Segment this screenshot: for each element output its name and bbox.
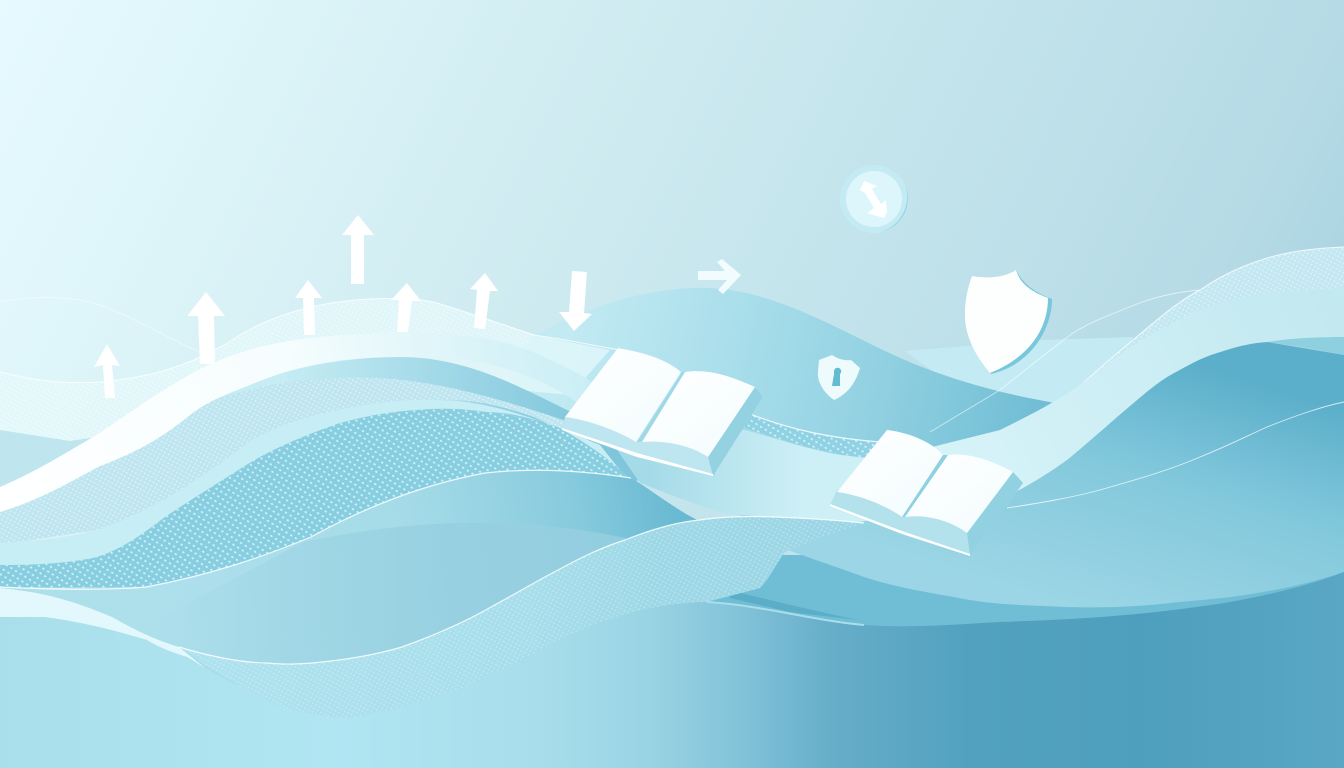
wave: right large layer: [740, 342, 1344, 607]
book two: right page: [905, 454, 1013, 533]
book one: base: [562, 375, 763, 476]
book one: bottom white edge: [562, 428, 713, 476]
wave: mesh band two: [0, 377, 600, 545]
book two: base: [830, 456, 1023, 555]
book one: gutter: [637, 372, 686, 442]
badge: circular double arrow: [840, 165, 908, 233]
book one: [562, 348, 763, 476]
central hill: [525, 288, 1055, 480]
arrow: up 2: [187, 292, 225, 364]
arrow: up 4: [342, 215, 374, 284]
wave: right wedge: [1267, 337, 1344, 355]
wave: dark mesh band three: [0, 409, 630, 588]
wave: left faint mesh band: [0, 297, 620, 441]
arrow: up 5: [391, 283, 421, 332]
wave: left pale zone: [0, 430, 130, 512]
arrow: up 1: [94, 344, 120, 398]
wave: lower hill: [0, 470, 760, 690]
wave: dark band under right layer: [690, 520, 1344, 640]
shield: large: [965, 270, 1052, 374]
keyhole: [832, 368, 841, 386]
wave: front body: [0, 572, 1344, 768]
wave: mid light band: [600, 425, 1010, 530]
arrow: right: [698, 259, 741, 294]
arrow: down: [559, 271, 592, 331]
wave: front mesh ribbon: [179, 516, 864, 718]
wave: mid mesh strip: [745, 412, 880, 458]
wave: light ribbon two: [0, 400, 620, 565]
arrow: up 6: [470, 273, 498, 329]
book one: right page: [642, 371, 755, 457]
book two: bottom white edge: [830, 504, 970, 556]
wave: bottom left bright sliver: [0, 588, 205, 668]
book two: side: [967, 472, 1023, 555]
badge: double arrow glyph: [860, 181, 887, 218]
wave: white contour lines: [0, 290, 1344, 664]
wave: white ribbon: [0, 333, 600, 512]
book two: gutter: [901, 455, 948, 517]
wave: right light ribbon: [920, 288, 1344, 510]
wave: hill under white ribbon: [100, 357, 640, 560]
far right light plane: [905, 337, 1133, 420]
wave: dark fold wedge: [728, 590, 858, 620]
wave: right mesh ribbon: [1083, 247, 1344, 383]
book one: fore edge: [708, 387, 763, 476]
arrow: up 3: [295, 280, 322, 335]
book two: [830, 430, 1023, 556]
shield: small with keyhole: [818, 355, 860, 400]
book two: left page: [837, 430, 943, 517]
wave: lower hill inner shade: [100, 523, 690, 720]
book one: left page: [565, 348, 681, 442]
